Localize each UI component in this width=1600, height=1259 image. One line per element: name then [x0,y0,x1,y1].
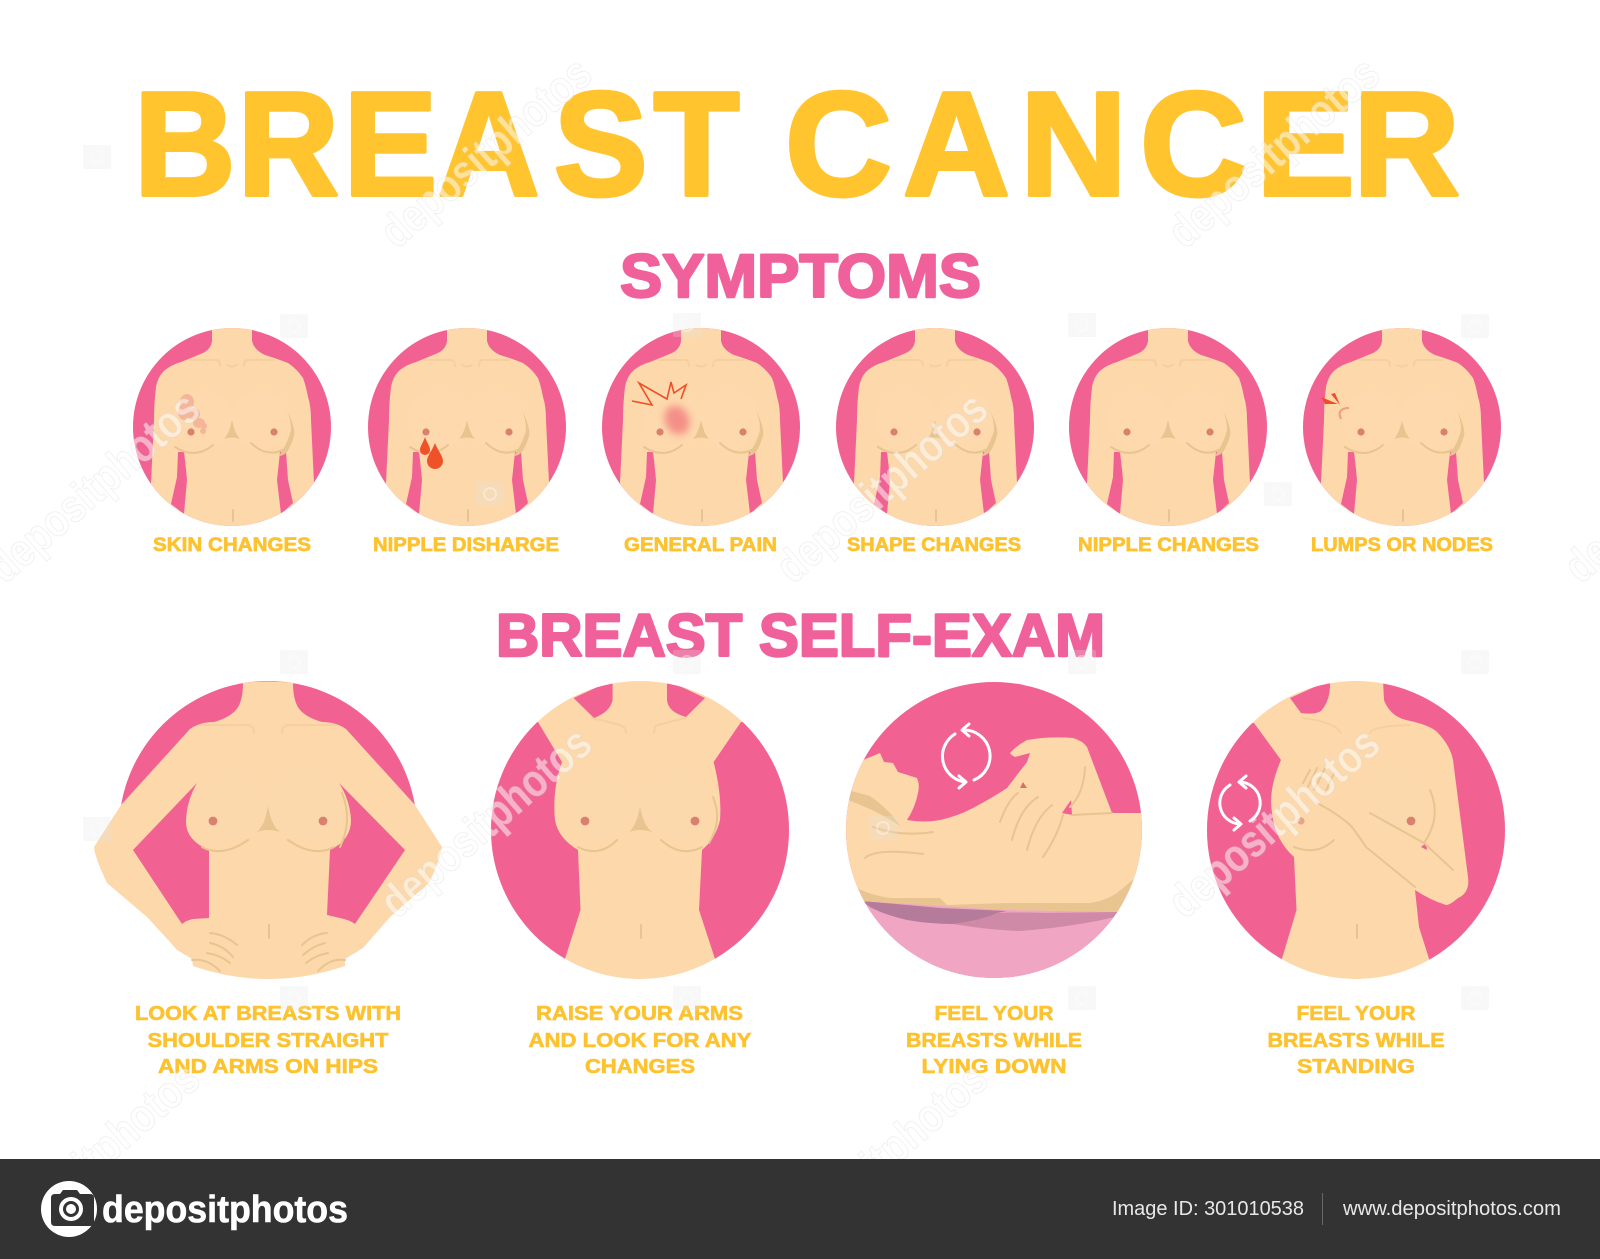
icon: rotate arrows [942,724,990,788]
label: SHAPE CHANGES [847,535,1021,556]
footer bar [0,1159,1600,1259]
heading: breast self-exam: BREAST SELF-EXAM [496,602,1105,669]
icon: discharge drops [420,437,443,469]
figure: standing [1200,680,1520,962]
panel: exam step 4 standing [1200,680,1520,979]
text: exam step 4: BREASTS WHILE [1268,1029,1444,1052]
text: exam step 4: STANDING [1297,1055,1415,1078]
text: exam step 4 [1268,1002,1444,1078]
icon: skin rash patches [178,394,207,434]
text: exam step 3: FEEL YOUR [934,1002,1054,1025]
text: exam step 2: CHANGES [585,1055,695,1078]
panel: shape changes [836,328,1034,556]
text: exam step 1: SHOULDER STRAIGHT [148,1029,389,1052]
title: CANCER [785,62,1460,227]
text: website: www.depositphotos.com [1342,1198,1561,1220]
label: LUMPS OR NODES [1311,535,1493,556]
panel: exam step 2 raised arms [480,680,800,979]
label: SKIN CHANGES [153,535,311,556]
watermark: stock photo text: depositphotos [1157,716,1389,928]
watermark: stock photo text: depositphotos [765,1051,997,1259]
text: exam step 1: LOOK AT BREASTS WITH [135,1002,401,1025]
figure: raised arms [480,680,800,962]
text: exam step 1: AND ARMS ON HIPS [158,1055,378,1078]
icon: depositphotos logo [41,1181,97,1237]
watermark: camera marks [83,145,1489,1010]
text: exam step 2 [528,1002,752,1078]
text: exam step 1 [135,1002,401,1078]
icon: rotate arrows [1220,776,1260,830]
panel: nipple discharge [368,328,566,556]
watermark: stock photo text: depositphotos [369,716,601,928]
text: logo wordmark: depositphotos [102,1189,348,1231]
watermark: stock photo text: depositphotos [1157,46,1389,258]
panel: exam step 3 lying down [840,682,1150,985]
label: GENERAL PAIN [624,535,777,556]
text: exam step 3: BREASTS WHILE [906,1029,1082,1052]
icon: pain spot and burst [632,382,694,439]
text: exam step 3 [906,1002,1082,1078]
watermark: stock photo text: depositphotos [369,46,601,258]
text: image id: Image ID: 301010538 [1112,1198,1304,1220]
panel: general pain [602,328,800,556]
figure: arms on hips [94,682,442,979]
icon: lump marker [1321,393,1349,419]
watermark: stock photo text: depositphotos [765,381,997,593]
label: NIPPLE DISHARGE [373,535,559,556]
title [134,61,1460,227]
title: BREAST [134,61,739,227]
text: exam step 3: LYING DOWN [922,1055,1066,1078]
panel: lumps or nodes [1303,328,1501,556]
panel: skin changes [133,328,331,556]
figure: lying down [840,737,1150,985]
label: NIPPLE CHANGES [1078,535,1259,556]
text: exam step 4: FEEL YOUR [1296,1002,1416,1025]
panel: exam step 1 arms on hips [94,681,442,979]
heading: symptoms: SYMPTOMS [620,242,981,310]
text: exam step 2: RAISE YOUR ARMS [536,1002,743,1025]
panel: nipple changes [1069,328,1267,556]
text: exam step 2: AND LOOK FOR ANY [528,1029,752,1052]
